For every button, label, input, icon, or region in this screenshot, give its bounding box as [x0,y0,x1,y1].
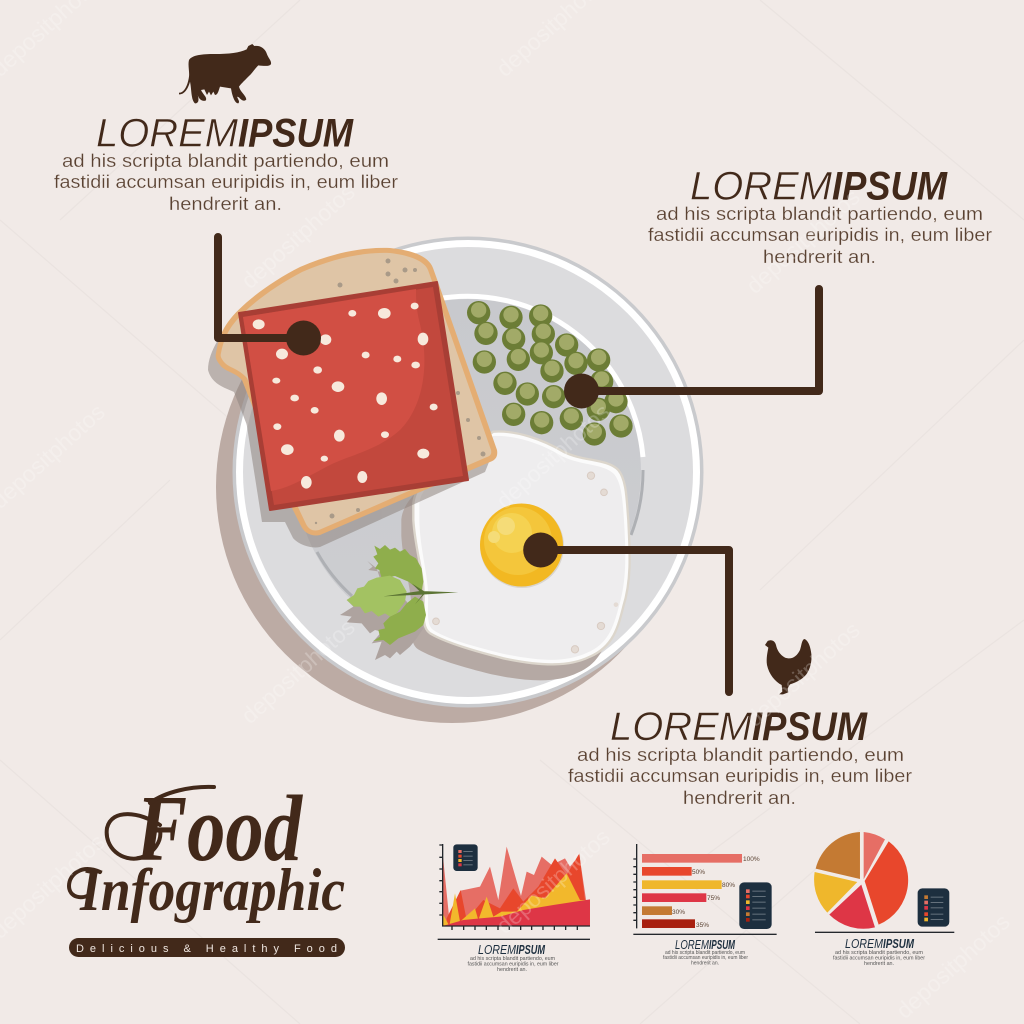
text block: bottom right: fastidii accumsan euripidis in, eum liber [568,766,912,786]
pale area [443,847,590,926]
pie chart caption: IPSUM [883,936,915,951]
bottom leaf [373,597,426,645]
plate shadow [216,251,688,723]
area chart caption: hendrerit an. [497,967,527,973]
orange slice [865,841,908,925]
herb leaf [340,545,458,660]
plate rim [232,236,704,708]
legend [453,844,478,871]
text block: top right: fastidii accumsan euripidis in, eum liber [648,225,992,245]
leaf stem [383,583,458,604]
bar chart caption: hendrerit an. [691,960,719,966]
heading: LOREM [610,705,753,749]
area chart caption: LOREM [478,942,516,957]
bar labels: 50% [692,869,705,876]
text: depositphotos [236,179,360,294]
axis [633,844,637,928]
bar chart caption: LOREM [675,937,709,952]
brown slice [816,832,860,879]
area chart [438,844,590,940]
bar chart caption: fastidii accumsan euripidis in, eum liber [663,955,748,961]
rule [815,932,954,933]
text: depositphotos [891,909,1015,1024]
rule [438,939,590,940]
rule [633,934,777,935]
egg white [413,431,630,664]
plate [216,236,704,723]
legend [739,882,772,929]
connector: meat [218,237,321,356]
red area [443,899,590,926]
title: Food Infographic: Food [135,777,304,881]
bread and meat shadow [208,300,489,547]
yolk [480,504,564,588]
text block: bottom right: IPSUM [752,705,869,749]
fried egg [401,431,630,680]
text block: top right: hendrerit an. [763,247,876,267]
bars [642,854,742,863]
orange area [447,853,590,926]
bar labels: 80% [722,882,735,889]
legend [918,888,949,927]
text block: top left: hendrerit an. [169,194,282,214]
text block: bottom right: hendrerit an. [683,788,796,808]
top leaf [373,545,423,592]
pie chart caption: fastidii accumsan euripidis in, eum liber [833,956,925,962]
bar chart caption: IPSUM [709,937,736,952]
pie chart caption: hendrerit an. [864,961,894,967]
text block: bottom right [568,705,912,808]
body: ad his scripta blandit partiendo, eum [577,745,904,765]
connector: egg [523,532,729,692]
egg shadow [401,447,618,680]
text: depositphotos [741,617,865,732]
icon: cow [179,44,271,103]
meat highlight [243,289,424,491]
leaf shadow [340,561,423,660]
yellow area [443,873,590,926]
tagline pill [69,938,345,957]
area chart caption: ad his scripta blandit partiendo, eum [470,956,555,962]
heading: LOREM [690,164,833,208]
pie chart caption [833,936,925,967]
bar labels: 100% [743,856,760,863]
peas [467,301,633,446]
bar labels: 30% [672,909,685,916]
left leaf [347,576,407,617]
text block: top left: IPSUM [238,112,355,156]
bar labels: 35% [696,922,709,929]
text block: top left: fastidii accumsan euripidis in, eum liber [54,172,398,192]
bar labels [672,856,760,929]
pie chart [814,832,954,933]
bar chart caption [663,937,748,966]
plate well [295,299,641,645]
area chart caption: fastidii accumsan euripidis in, eum liber [468,962,559,968]
title: Food Infographic: Infographic [79,857,345,923]
yellow slice [814,872,857,913]
fat spots [253,303,438,489]
connector: peas [564,289,819,408]
text: depositphotos [491,824,615,939]
area chart caption [468,942,559,973]
text block: top right [648,164,992,267]
red slice [829,885,875,929]
bar labels: 75% [707,895,720,902]
body: ad his scripta blandit partiendo, eum [62,151,389,171]
text block: top left [54,112,398,214]
bar chart caption: ad his scripta blandit partiendo, eum [665,950,745,956]
title: Food Infographic [69,777,345,957]
title swashes [69,787,214,897]
body: ad his scripta blandit partiendo, eum [656,204,983,224]
meat slice [239,282,468,510]
text: depositphotos [491,399,615,514]
bar chart [633,844,777,935]
axes [439,844,590,930]
text: depositphotos [236,614,360,729]
text block: top right: IPSUM [832,164,949,208]
tagline pill: Delicious & Healthy Food [76,943,337,955]
area chart caption: IPSUM [516,942,546,957]
text: depositphotos [741,184,865,299]
bread slice [216,248,497,535]
icon: hen [765,639,812,694]
pink slice [864,832,885,879]
pie chart caption: LOREM [845,936,883,951]
heading: LOREM [96,112,239,156]
pie chart caption: ad his scripta blandit partiendo, eum [835,950,923,956]
